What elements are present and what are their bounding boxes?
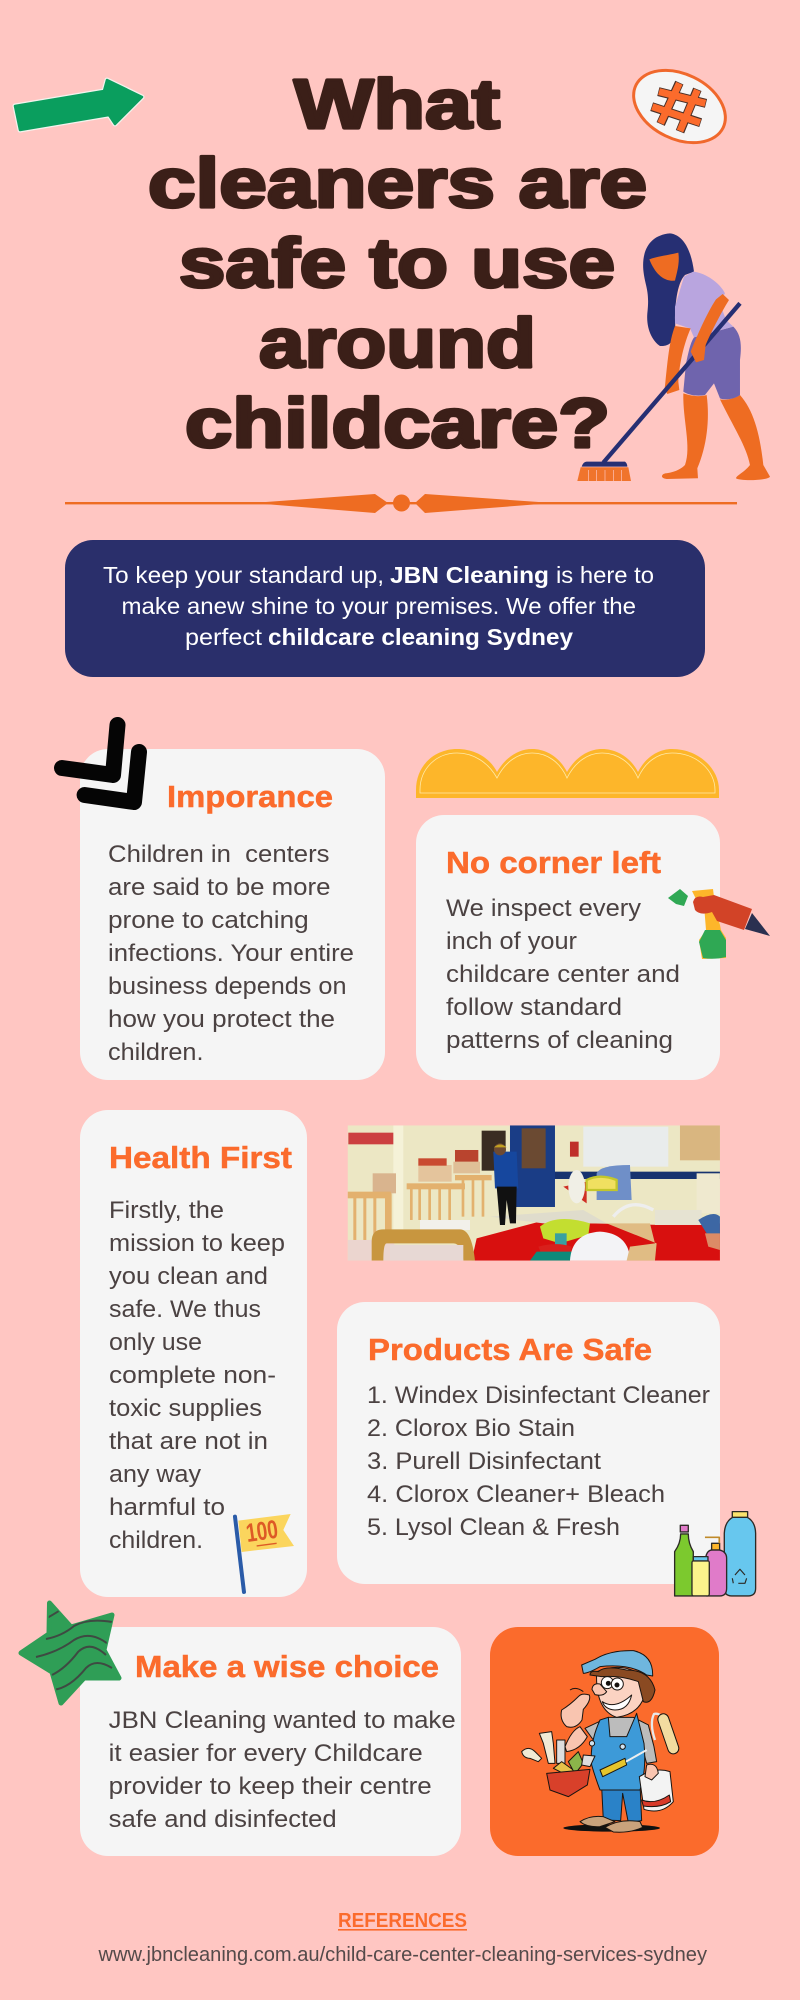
text: wise choice body: provider to keep their centre: [109, 1773, 432, 1800]
references url: www.jbncleaning.com.au/child-care-center-cleaning-services-sydney: [98, 1943, 708, 1966]
panel: orange mascot card: [490, 1627, 719, 1856]
references heading: REFERENCES: [338, 1910, 467, 1932]
text: importance body: prone to catching: [108, 907, 309, 934]
text: health body: any way: [109, 1461, 202, 1488]
title: cleaners are: [148, 144, 647, 222]
text: no corner body: follow standard: [446, 994, 622, 1021]
intro banner: make anew shine to your premises. We offer the: [122, 593, 636, 619]
icon: green arrow: [15, 80, 142, 130]
intro banner: childcare cleaning Sydney: [268, 624, 573, 650]
text: health body: complete non-: [109, 1362, 276, 1389]
text: health body: safe. We thus: [109, 1296, 261, 1323]
text: importance body: Children in centers: [108, 841, 330, 868]
panel: no corner left: [416, 815, 720, 1080]
title: What: [294, 65, 500, 143]
title: safe to use: [179, 224, 615, 302]
text: health body: that are not in: [109, 1428, 268, 1455]
icon: green star: [21, 1603, 119, 1703]
text: importance body: children.: [108, 1039, 204, 1066]
divider: [65, 494, 737, 513]
icon: cartoon handyman: [522, 1651, 673, 1832]
text: health body: toxic supplies: [109, 1395, 262, 1422]
text: wise choice body: safe and disinfected: [109, 1806, 337, 1833]
text: no corner body: patterns of cleaning: [446, 1027, 673, 1054]
icon: black chevrons: [62, 725, 139, 802]
icon: hashtag badge: [622, 56, 737, 157]
text: no corner body: We inspect every: [446, 895, 642, 922]
text: wise choice body: [109, 1707, 456, 1833]
icon: spray bottle: [668, 889, 770, 959]
heading: no corner left: No corner left: [446, 845, 661, 880]
heading: products are safe: Products Are Safe: [368, 1332, 652, 1367]
text: health body: harmful to: [109, 1494, 225, 1521]
heading: health first: Health First: [109, 1140, 292, 1175]
intro banner: [65, 540, 705, 677]
icon: yellow scallop: [416, 749, 719, 798]
list: products: 5. Lysol Clean & Fresh: [367, 1514, 620, 1541]
list: products: 3. Purell Disinfectant: [367, 1448, 601, 1475]
icon: woman sweeping with broom: [577, 233, 770, 481]
title: around: [259, 304, 536, 382]
text: importance body: how you protect the: [108, 1006, 335, 1033]
text: health body: children.: [109, 1527, 203, 1554]
icon: 100 flag: [235, 1514, 294, 1592]
text: health body: mission to keep: [109, 1230, 285, 1257]
intro banner: is here to: [556, 562, 654, 588]
panel: products are safe: [337, 1302, 720, 1584]
panel: health first: [80, 1110, 307, 1597]
photo: cleaner figure: [493, 1143, 518, 1225]
icon: 100 flag: 100: [244, 1514, 280, 1548]
text: health body: you clean and: [109, 1263, 268, 1290]
text: wise choice body: it easier for every Childcare: [109, 1740, 423, 1767]
panel: importance: [80, 749, 385, 1080]
intro banner: perfect: [185, 624, 263, 650]
text: wise choice body: JBN Cleaning wanted to make: [109, 1707, 456, 1734]
heading: make a wise choice: Make a wise choice: [135, 1649, 439, 1684]
title: [148, 65, 647, 462]
text: importance body: infections. Your entire: [108, 940, 354, 967]
list: products: 2. Clorox Bio Stain: [367, 1415, 575, 1442]
text: importance body: business depends on: [108, 973, 346, 1000]
text: no corner body: inch of your: [446, 928, 577, 955]
panel: make a wise choice: [80, 1627, 461, 1856]
text: no corner body: [446, 895, 680, 1054]
list: products: 4. Clorox Cleaner+ Bleach: [367, 1481, 665, 1508]
heading: importance: Imporance: [167, 779, 333, 814]
list: products: [367, 1382, 710, 1541]
text: health body: Firstly, the: [109, 1197, 224, 1224]
list: products: 1. Windex Disinfectant Cleaner: [367, 1382, 710, 1409]
intro banner: JBN Cleaning: [390, 562, 549, 588]
text: health body: only use: [109, 1329, 202, 1356]
text: health body: [109, 1197, 285, 1554]
intro banner: To keep your standard up,: [103, 562, 384, 588]
photo: cleaner in childcare room: [348, 1125, 720, 1261]
text: importance body: [108, 841, 354, 1066]
icon: cleaning bottles: [675, 1512, 756, 1596]
text: no corner body: childcare center and: [446, 961, 680, 988]
title: childcare?: [185, 384, 610, 462]
text: importance body: are said to be more: [108, 874, 330, 901]
